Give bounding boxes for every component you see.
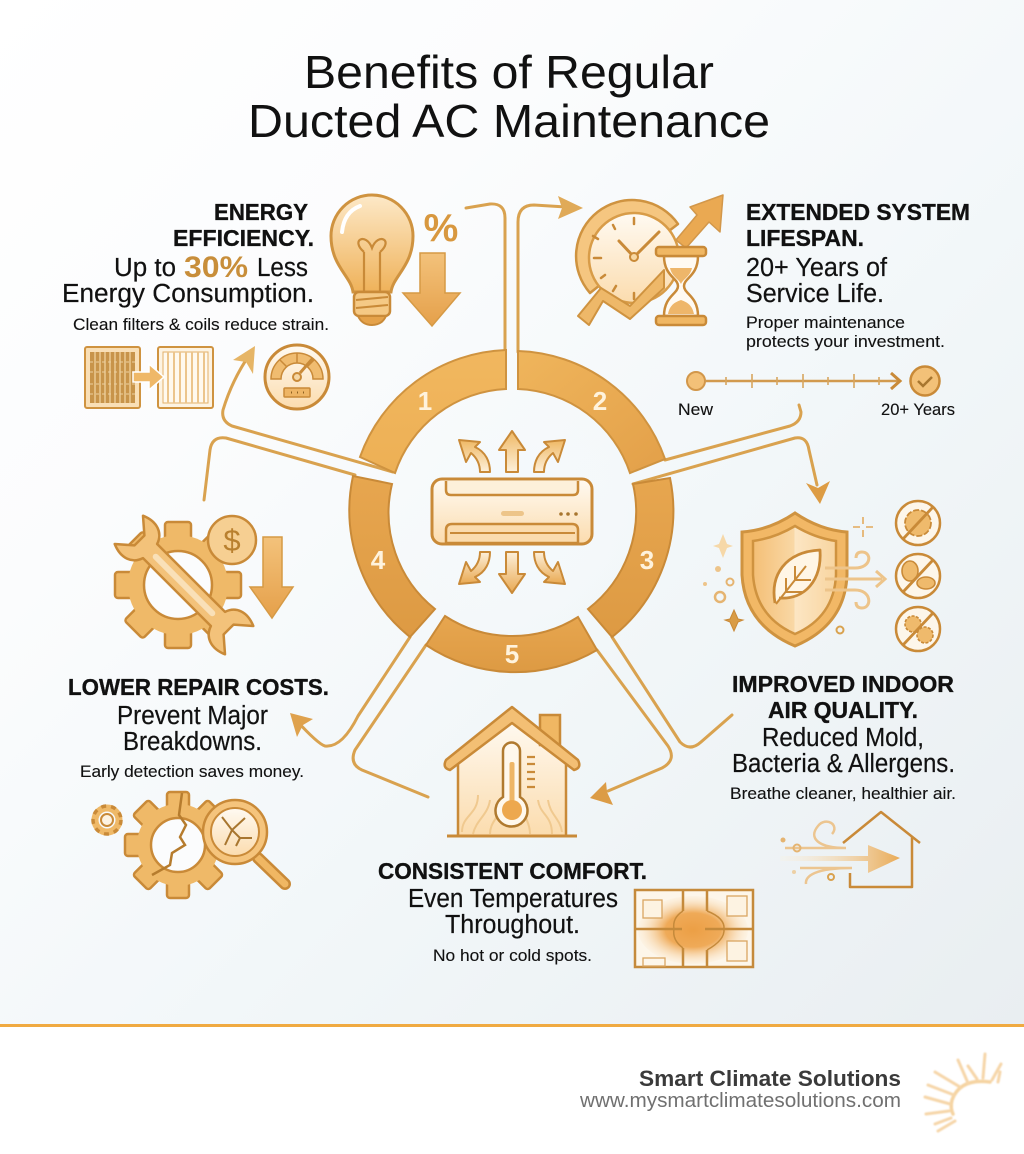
timeline: 20+ Years (881, 401, 955, 419)
indoor unit body (432, 479, 592, 544)
icon: clean filter (158, 347, 213, 408)
heading: CONSISTENT COMFORT. (378, 858, 647, 884)
subheading with 30%: Less (257, 254, 308, 282)
icon: percent symbol: % (424, 207, 458, 250)
icon: floor plan with heat (635, 890, 753, 967)
heading (173, 199, 314, 251)
icon: down arrow (250, 537, 293, 618)
heading: LIFESPAN. (746, 225, 864, 251)
footer brand: www.mysmartclimatesolutions.com (579, 1090, 901, 1112)
segment 1: 1 (418, 386, 432, 416)
icon: clean airflow (825, 552, 885, 608)
segment 1 (360, 350, 506, 473)
subheading with 30%: 30% (184, 251, 248, 284)
arrow: channel to energy efficiency (466, 204, 505, 350)
footer divider (0, 1024, 1024, 1027)
heading (732, 671, 954, 723)
icon: gear (115, 522, 241, 648)
caption: No hot or cold spots. (433, 947, 592, 965)
display and lights (501, 511, 578, 516)
arrow: ring to comfort (590, 650, 671, 805)
heading: EXTENDED SYSTEM (746, 199, 970, 225)
icon: down arrow (403, 253, 460, 326)
icon: no mold (896, 501, 940, 545)
icon: growth arrow (676, 195, 723, 248)
icon: house with thermometer (445, 707, 579, 836)
icon: air conditioner with airflow (432, 431, 592, 593)
ring: five numbered segments (349, 350, 673, 672)
arrow: air quality return line (612, 637, 732, 747)
footer brand: Smart Climate Solutions (639, 1066, 901, 1091)
icon: wrench (113, 514, 255, 656)
title (248, 46, 770, 147)
lower vent (446, 524, 578, 543)
panel: improved indoor air quality (703, 501, 956, 887)
heading: ENERGY (214, 199, 308, 225)
segment 4 (349, 476, 435, 637)
connector arrows (204, 196, 830, 805)
panel: consistent comfort (378, 707, 753, 967)
subheading (408, 885, 618, 939)
heading (746, 199, 970, 251)
icon: air flowing into house (780, 812, 920, 887)
caption: protects your investment. (746, 333, 945, 351)
arrow: repair link upward (204, 438, 355, 500)
title: Benefits of Regular (304, 46, 714, 98)
panel: lower repair costs (68, 514, 329, 898)
panel: extended system lifespan (576, 195, 970, 419)
icon: filter arrow (133, 364, 164, 390)
icon: small gear (93, 806, 121, 834)
upper vent (446, 481, 578, 495)
icon: magnifying glass (203, 800, 285, 884)
subheading with 30% (62, 251, 314, 308)
icon: sparkles and dots (703, 517, 873, 634)
caption: Proper maintenance (746, 314, 905, 332)
segment 3 (588, 478, 673, 637)
timeline: New (678, 401, 713, 419)
caption: Early detection saves money. (80, 763, 304, 781)
footer brand (579, 1066, 901, 1112)
heading: IMPROVED INDOOR (732, 671, 954, 697)
subheading: Service Life. (746, 280, 884, 308)
subheading: 20+ Years of (746, 254, 888, 282)
icon: dirty filter (85, 347, 140, 408)
segment 3: 3 (640, 545, 654, 575)
subheading with 30%: Energy Consumption. (62, 280, 314, 308)
icon: no allergens (896, 607, 940, 651)
icon: clock (576, 200, 679, 303)
icon: shield with leaf (742, 513, 847, 646)
upward airflow arrows (459, 431, 565, 472)
segment 2 (518, 351, 665, 473)
downward airflow arrows (459, 552, 565, 593)
icon: dollar coin (208, 516, 256, 564)
caption (746, 314, 945, 351)
title: Ducted AC Maintenance (248, 95, 770, 147)
subheading: Reduced Mold, (762, 724, 924, 752)
heading: LOWER REPAIR COSTS. (68, 674, 329, 700)
timeline (678, 366, 955, 419)
heading: EFFICIENCY. (173, 225, 314, 251)
icon: sun logo (925, 1054, 1001, 1131)
subheading: Bacteria & Allergens. (732, 750, 955, 778)
subheading (746, 254, 888, 308)
icon: no bacteria (896, 554, 940, 598)
subheading: Even Temperatures (408, 885, 618, 913)
panel: energy efficiency (62, 195, 460, 409)
subheading (732, 724, 955, 778)
icon: light bulb (331, 195, 413, 325)
segment 2: 2 (593, 386, 607, 416)
subheading: Breakdowns. (123, 728, 262, 756)
arrow: channel to extended lifespan (518, 196, 583, 352)
arrow: lifespan return line (665, 405, 801, 460)
arrow: ring to energy details (223, 346, 393, 472)
icon: hourglass (656, 247, 706, 325)
subheading: Prevent Major (117, 702, 268, 730)
icon: cracked gear (125, 792, 231, 898)
caption: Breathe cleaner, healthier air. (730, 785, 956, 803)
segment 4: 4 (371, 545, 386, 575)
icon: zigzag trend line (578, 270, 664, 325)
ring inner glow (390, 390, 634, 634)
arrow: comfort return line (353, 645, 428, 797)
footer background (0, 1027, 1024, 1154)
heading: AIR QUALITY. (768, 697, 918, 723)
arrow: ring to air quality (633, 438, 830, 504)
segment 5 (426, 616, 597, 672)
subheading (117, 702, 268, 756)
segment 5: 5 (505, 639, 519, 669)
icon: dollar coin: $ (223, 523, 241, 558)
subheading with 30%: Up to (114, 254, 176, 282)
subheading: Throughout. (445, 911, 580, 939)
icon: efficiency gauge (265, 345, 329, 409)
arrow: ring to repair costs (290, 637, 410, 746)
caption: Clean filters & coils reduce strain. (73, 316, 329, 334)
